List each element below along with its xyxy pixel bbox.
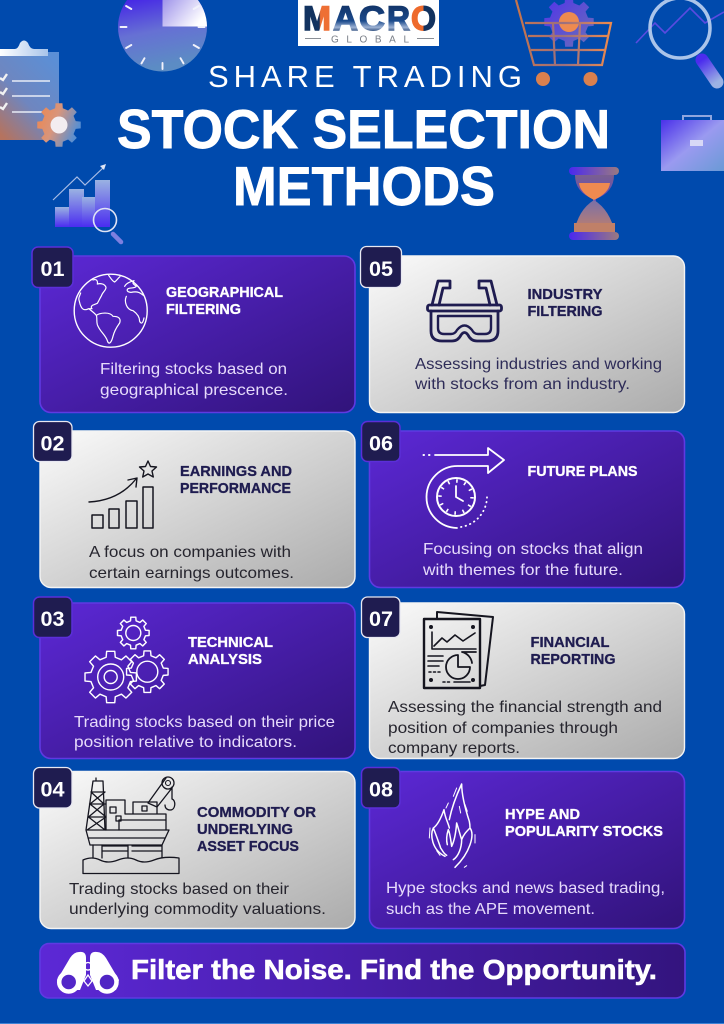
slogan: Filter the Noise. Find the Opportunity. [131,954,657,985]
description [414,356,662,393]
description: with stocks from an industry. [414,376,630,393]
description: certain earnings outcomes. [89,565,294,582]
panel: 01 geographical filtering [32,247,355,412]
panel: 06 future plans [362,422,684,588]
logo: GLOBAL [331,34,409,46]
heading: FILTERING [166,302,241,318]
badge 03: 03 [40,608,64,631]
description: A focus on companies with [89,544,291,561]
title: STOCK SELECTION [117,98,610,160]
heading: POPULARITY STOCKS [505,824,663,840]
heading [505,807,663,840]
logo: C [359,0,385,38]
icon: magnifier with line chart [636,0,724,82]
heading: COMMODITY OR [197,805,317,821]
description: Focusing on stocks that align [423,541,643,558]
badge 07 [362,597,400,638]
heading [530,635,616,668]
icon: briefcase [661,116,724,171]
description [388,699,662,757]
badge 02 [34,422,72,462]
heading: EARNINGS AND [180,464,292,480]
subtitle: SHARE TRADING [208,59,522,94]
description: position of companies through [388,720,618,737]
badge 04 [34,768,72,808]
icon: financial report [424,612,493,688]
footer banner [40,944,685,998]
badge 03 [34,597,72,638]
icon: clock [118,0,207,72]
description: such as the APE movement. [386,901,595,918]
description [386,880,665,918]
logo [298,0,439,46]
panel: 02 earnings and performance [34,422,355,588]
description: company reports. [388,740,520,757]
panel: 07 financial reporting [362,597,684,758]
badge 04: 04 [40,778,65,802]
description: geographical prescence. [100,382,288,399]
description: Filtering stocks based on [100,361,287,378]
icon: bar chart with magnifier [53,164,121,242]
description [100,361,288,399]
heading: GEOGRAPHICAL [166,285,283,301]
description: Trading stocks based on their price [74,714,335,731]
title: METHODS [233,155,495,217]
description [422,541,643,579]
panel: 03 technical analysis [34,597,355,758]
badge 07: 07 [369,608,393,631]
description [89,544,294,582]
heading [180,464,292,497]
description: Hype stocks and news based trading, [386,880,665,897]
description: with themes for the future. [422,562,623,579]
heading: UNDERLYING [197,822,293,838]
logo: A [333,0,358,38]
heading: ANALYSIS [188,652,262,668]
icon: hourglass [569,167,619,240]
panel: 05 industry filtering [360,246,684,412]
logo: R [387,0,410,38]
heading [197,805,317,855]
description [69,881,326,918]
description: Trading stocks based on their [69,881,290,898]
heading: FUTURE PLANS [528,464,638,480]
icon: binoculars [57,952,119,992]
description: position relative to indicators. [74,734,297,751]
heading: INDUSTRY [528,287,603,303]
description: underlying commodity valuations. [69,901,326,918]
heading: FINANCIAL [530,635,610,651]
description: Assessing industries and working [415,356,662,373]
heading [528,287,603,320]
logo: M [303,0,331,38]
badge 06: 06 [369,432,393,456]
icon: gears [85,617,168,703]
icon: arrow around clock [424,448,504,528]
badge 05 [360,246,402,288]
badge 06 [362,422,400,462]
badge 01: 01 [40,258,65,281]
heading: PERFORMANCE [180,481,291,497]
heading: HYPE AND [505,807,580,823]
icon: safety goggles [428,281,502,341]
logo: O [411,0,436,38]
heading: FILTERING [528,304,602,320]
icon: oil rig [83,777,179,874]
badge 01 [32,247,73,288]
heading: ASSET FOCUS [197,839,299,855]
icon: clipboard with gear [0,40,81,147]
icon: rising bars with star [89,461,156,528]
title [117,98,610,217]
description: Assessing the financial strength and [388,699,662,716]
panel: 04 commodity or underlying asset focus [34,768,355,928]
badge 08 [362,768,400,808]
icon: globe [74,274,147,347]
heading: TECHNICAL [188,635,273,651]
badge 02: 02 [40,432,64,456]
badge 08: 08 [369,778,393,802]
description [74,714,335,751]
badge 05: 05 [369,258,393,281]
heading: REPORTING [530,652,616,668]
panel: 08 hype and popularity stocks [362,768,684,928]
heading [166,285,283,318]
icon: flame [429,784,475,867]
heading [188,635,273,668]
icon: shopping cart with gear [516,0,611,86]
